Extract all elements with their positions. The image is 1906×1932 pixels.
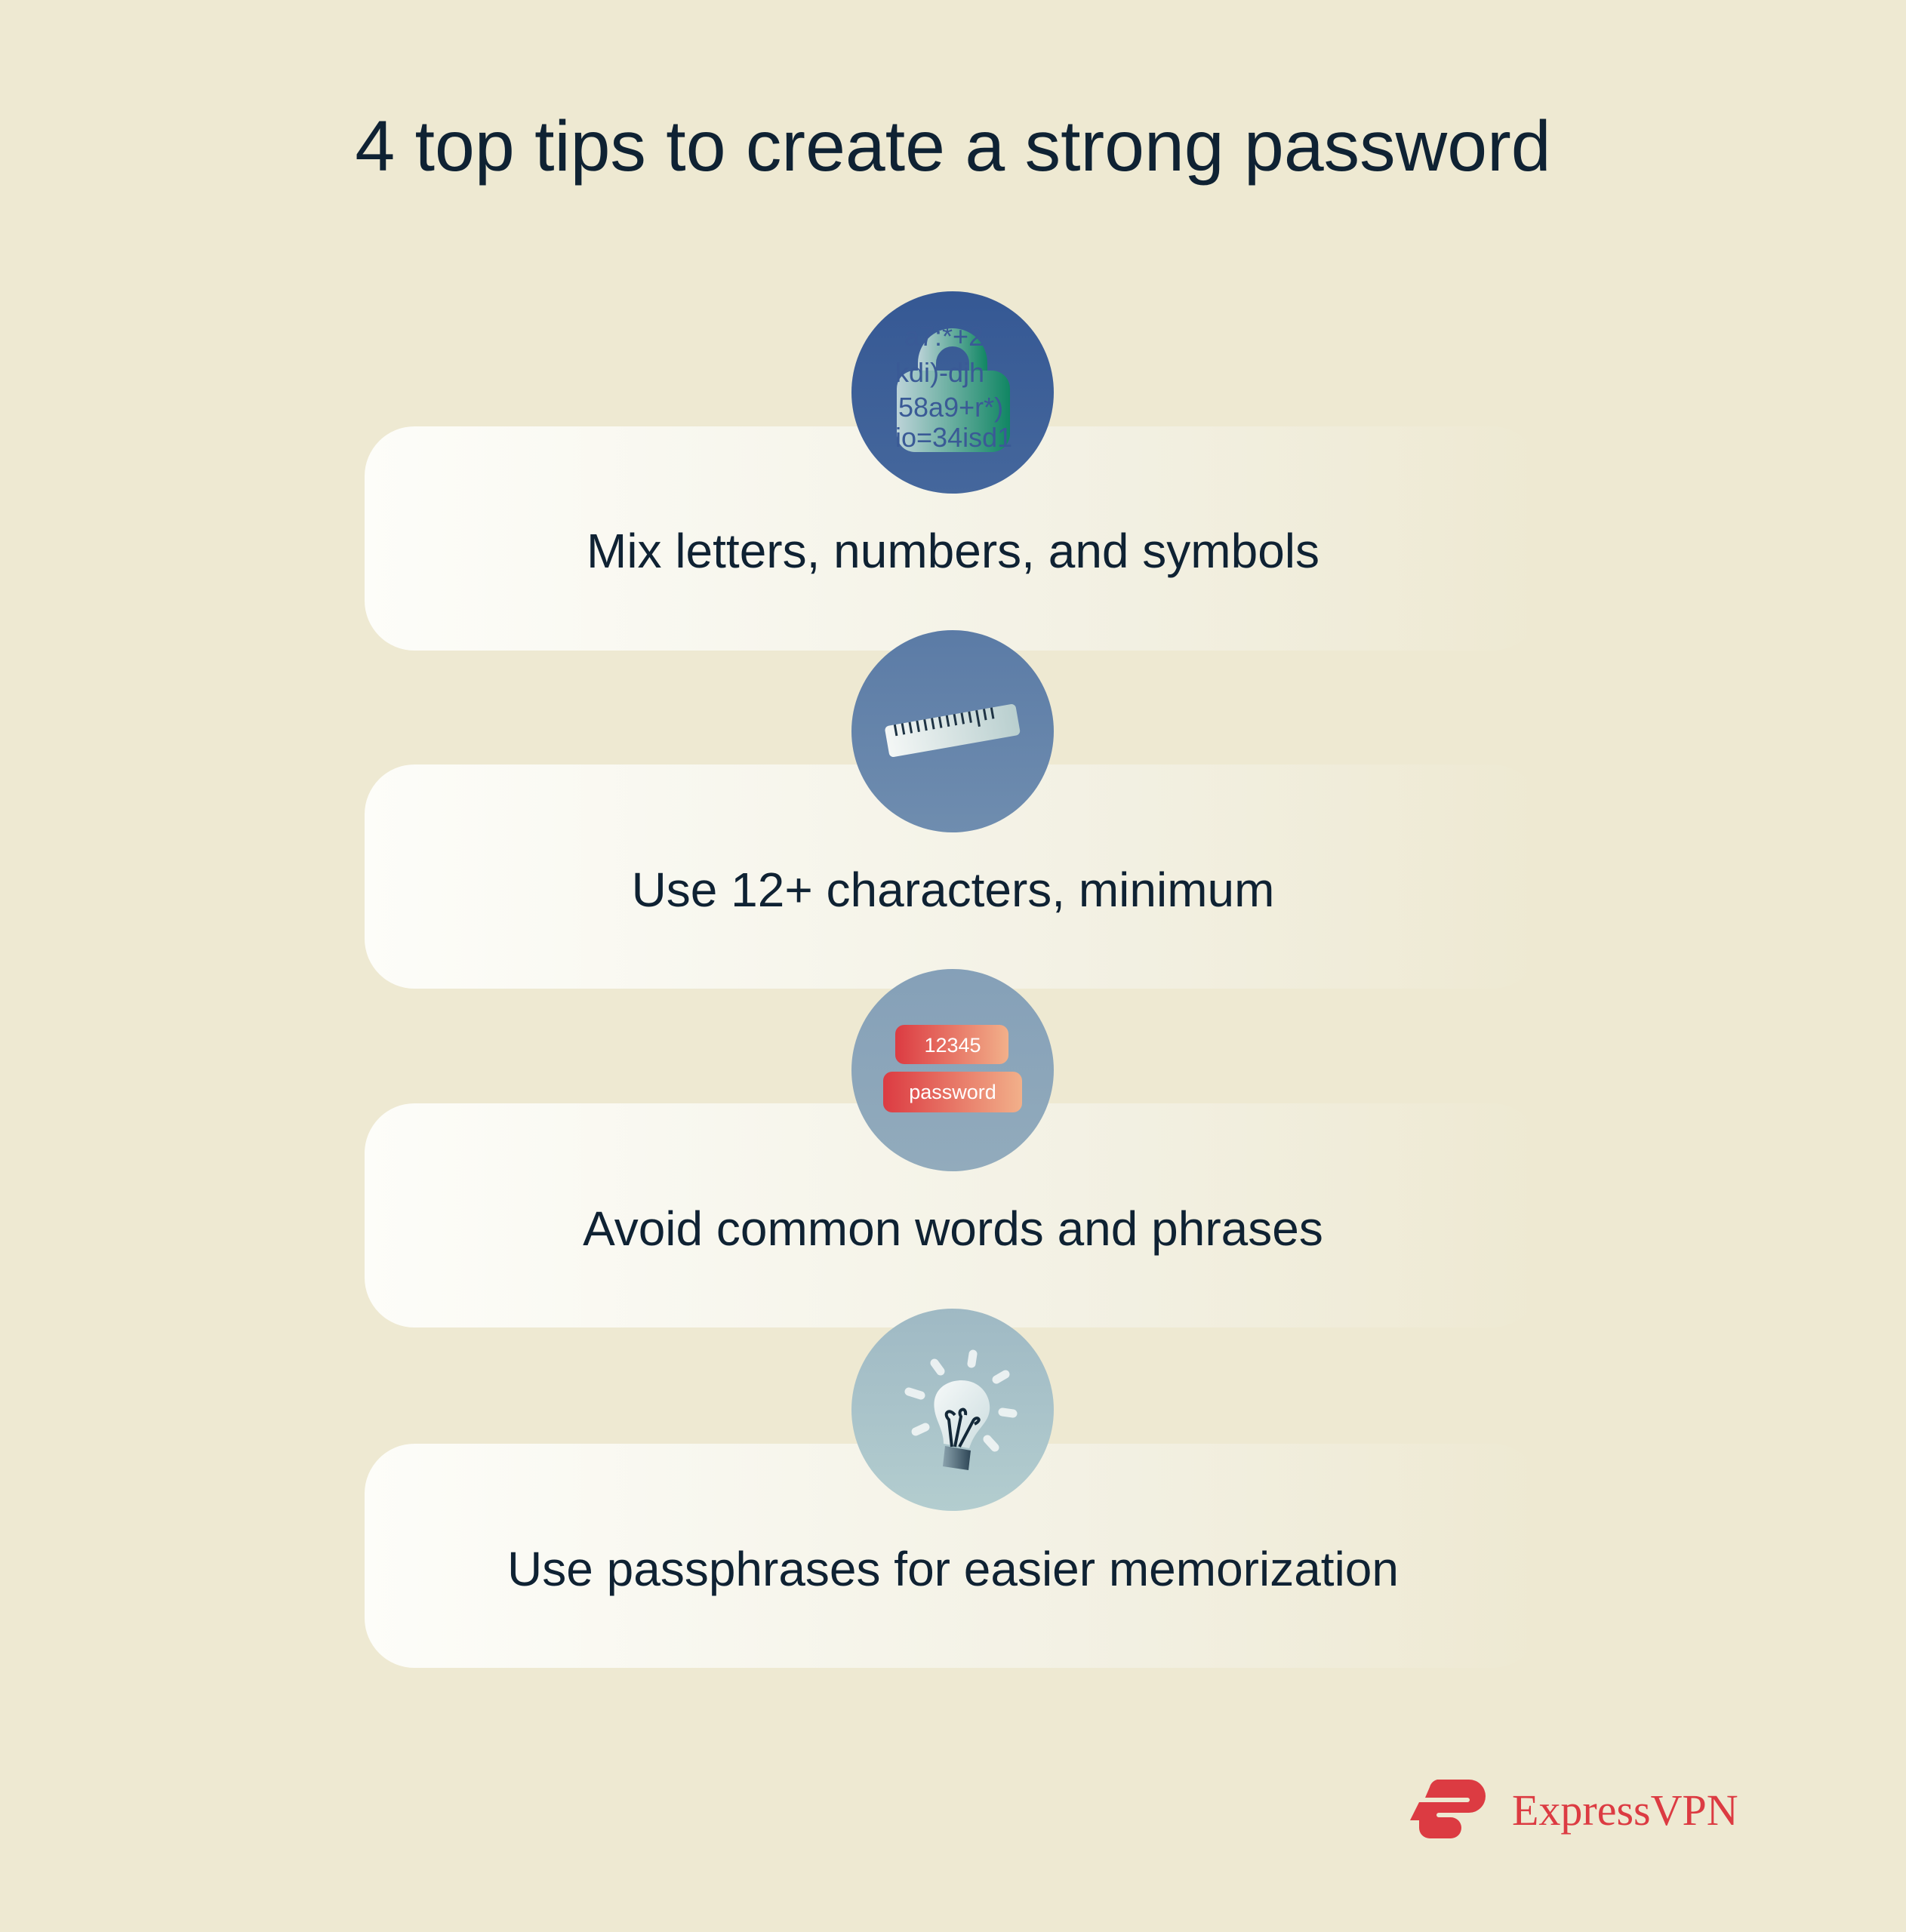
icon: logo mark — [1410, 1780, 1486, 1838]
text 4: Use passphrases for easier memorization — [507, 1542, 1399, 1596]
icon: common passwords circle — [851, 969, 1054, 1171]
icon: lock circle — [851, 291, 1054, 494]
text 1: Mix letters, numbers, and symbols — [587, 524, 1319, 578]
icon: lightbulb circle — [851, 1309, 1054, 1511]
title: 4 top tips to create a strong password — [355, 106, 1551, 186]
card 1 — [365, 426, 1542, 651]
icon: common passwords circle: 12345 — [924, 1034, 981, 1057]
card 2 — [365, 764, 1542, 989]
icon: lock circle: 58a9+r*) — [898, 392, 1003, 423]
logo: ExpressVPN — [1410, 1780, 1738, 1838]
card 3 — [365, 1103, 1542, 1327]
text 3: Avoid common words and phrases — [583, 1201, 1323, 1256]
icon: lock circle: a7:*+2 — [904, 321, 984, 352]
icon: lock circle: io=34isd1 — [895, 422, 1012, 453]
icon: common passwords circle: password — [909, 1081, 996, 1103]
icon: lock circle: kdi)-djh — [895, 357, 984, 388]
icon: ruler circle — [851, 630, 1054, 832]
logo text: ExpressVPN — [1512, 1786, 1738, 1835]
text 2: Use 12+ characters, minimum — [632, 863, 1274, 917]
card 4 — [365, 1444, 1542, 1668]
